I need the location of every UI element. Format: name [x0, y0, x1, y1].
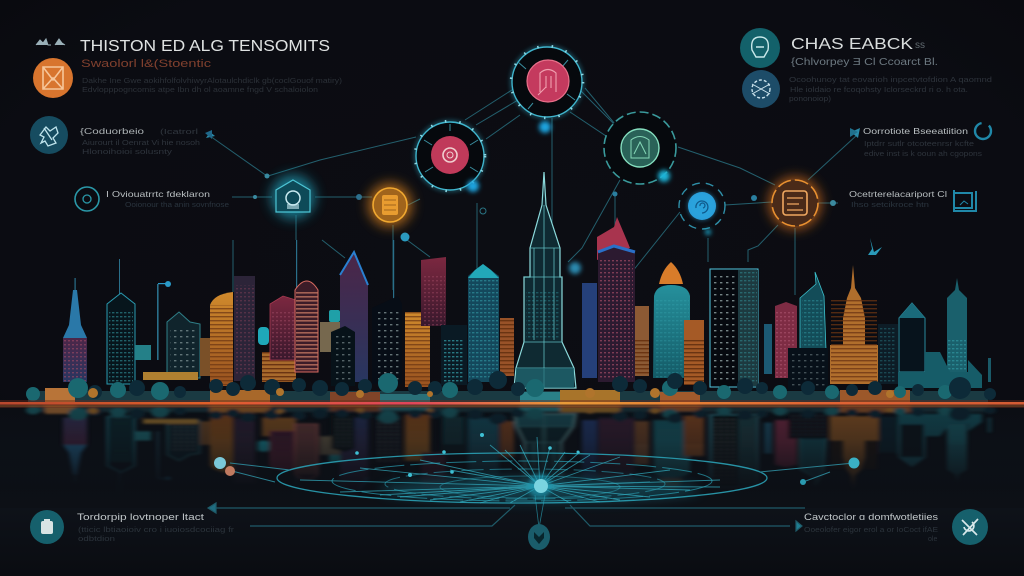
header: top right title block — [740, 28, 992, 108]
header: top right title block: CHAS EABCK — [791, 36, 913, 53]
node: orange right — [769, 177, 821, 229]
icon: tools circle — [952, 509, 988, 545]
header: top left title block — [33, 38, 343, 98]
icon: ring — [975, 123, 991, 139]
callout: bottom left: (tticic lbtiaoioiv cro i iuoiosdcociiag fr — [78, 527, 235, 534]
callout: bottom right: Ooeolofer eigor erol a or IoCoct ifAE — [804, 527, 938, 534]
callout: left radar — [75, 187, 229, 211]
icon: bottom drop — [528, 524, 550, 550]
node: blue — [679, 183, 725, 235]
left center buildings — [210, 252, 514, 387]
callout: left coordination: (Icatrorl — [160, 129, 199, 136]
icon: teal head — [740, 28, 780, 68]
connector lines network — [210, 88, 857, 300]
callout: right central: Ihso setcikroce htn — [851, 202, 929, 209]
callout: right central: Ocetrterelacariport Cl — [849, 189, 947, 199]
node: orange left — [368, 183, 412, 227]
description: Edvlopppogncomis atpe Ibn dh ol aoamne fngd V schaloiolon — [82, 85, 318, 94]
side orbs — [214, 457, 860, 485]
radial network disk — [277, 433, 767, 528]
callout: left coordination: Aiurourt il Oenrat Vi hie nosoh — [82, 140, 200, 147]
central tower — [514, 172, 576, 388]
hub — [528, 474, 552, 498]
far left buildings — [63, 281, 210, 384]
city skyline — [26, 172, 996, 402]
callout: left radar: I Oviouatrrtc fdeklaron — [106, 189, 210, 199]
callout: left coordination: {Coduorbeio — [80, 126, 144, 136]
callout: bottom right — [804, 509, 988, 545]
icon: document circle — [30, 510, 64, 544]
description — [82, 76, 343, 94]
header: top right title block: Ocoohunoy tat eovarioh inpcetvtofdion A qaomnd — [789, 75, 992, 84]
header: top right title block: ss — [915, 40, 925, 51]
radial spokes — [300, 437, 720, 503]
node: teal left — [271, 175, 315, 219]
spires and poles — [74, 240, 394, 360]
bottom arrows — [208, 503, 805, 531]
red horizon line — [0, 400, 1024, 408]
callout: left coordination: Hlonoihoioi solusnty — [82, 149, 173, 156]
small connector nodes — [206, 128, 882, 274]
callout: right central — [849, 189, 976, 211]
node: left red hub — [415, 121, 485, 192]
title: THISTON ED ALG TENSOMITS — [80, 38, 330, 55]
tree line and ground — [26, 371, 996, 402]
icon: puzzle scribble — [40, 127, 58, 146]
callout: bottom left — [30, 510, 235, 544]
callout: right outcome — [850, 123, 991, 158]
icon: blue brain — [742, 70, 780, 108]
callout: right outcome: edive inst is k ooun ah cgopons — [864, 151, 983, 158]
reflection fade — [0, 404, 1024, 508]
description: Dakhe Ine Gwe aokihfolfolvhiwyrAlotaulchdiclk gb(coclGouof matiry) — [82, 76, 343, 85]
callout: bottom right: ole — [928, 536, 937, 543]
center right buildings — [582, 217, 828, 390]
subtitle: Swaolorl l&(Stoentic — [81, 58, 212, 70]
callout: right outcome: Oorrotiote Bseeatiition — [863, 126, 968, 136]
icon: image frame — [954, 190, 976, 211]
icon: orange envelope — [33, 58, 73, 98]
callout: left radar: Ooionour tha anin sovnfnose — [125, 202, 229, 209]
node: green hub — [604, 112, 676, 184]
header: top right title block: Hle ioldaio re fcoqohsty Iclorseckrd ri o. h ota. — [790, 85, 968, 94]
callout: left coordination — [30, 116, 212, 156]
header: top right title block: {Chlvorpey Ǝ Cl Ccoarct Bl. — [791, 57, 938, 68]
node: top pink hub — [511, 46, 583, 133]
callout: right outcome: Iptdrr sutlr otcoteenrsr kcfte — [864, 141, 974, 148]
callout: bottom left: odbtdion — [78, 536, 115, 543]
callout: bottom right: Cavctoclor ɑ domfwotletiies — [804, 512, 939, 522]
callout: bottom left: Tordorpip lovtnoper ltact — [77, 512, 205, 522]
logo glyph — [36, 39, 65, 45]
reflection of skyline — [24, 404, 996, 486]
right buildings — [830, 265, 991, 388]
lower water background — [0, 404, 1024, 576]
header: top right title block: pononoiop) — [789, 94, 832, 103]
